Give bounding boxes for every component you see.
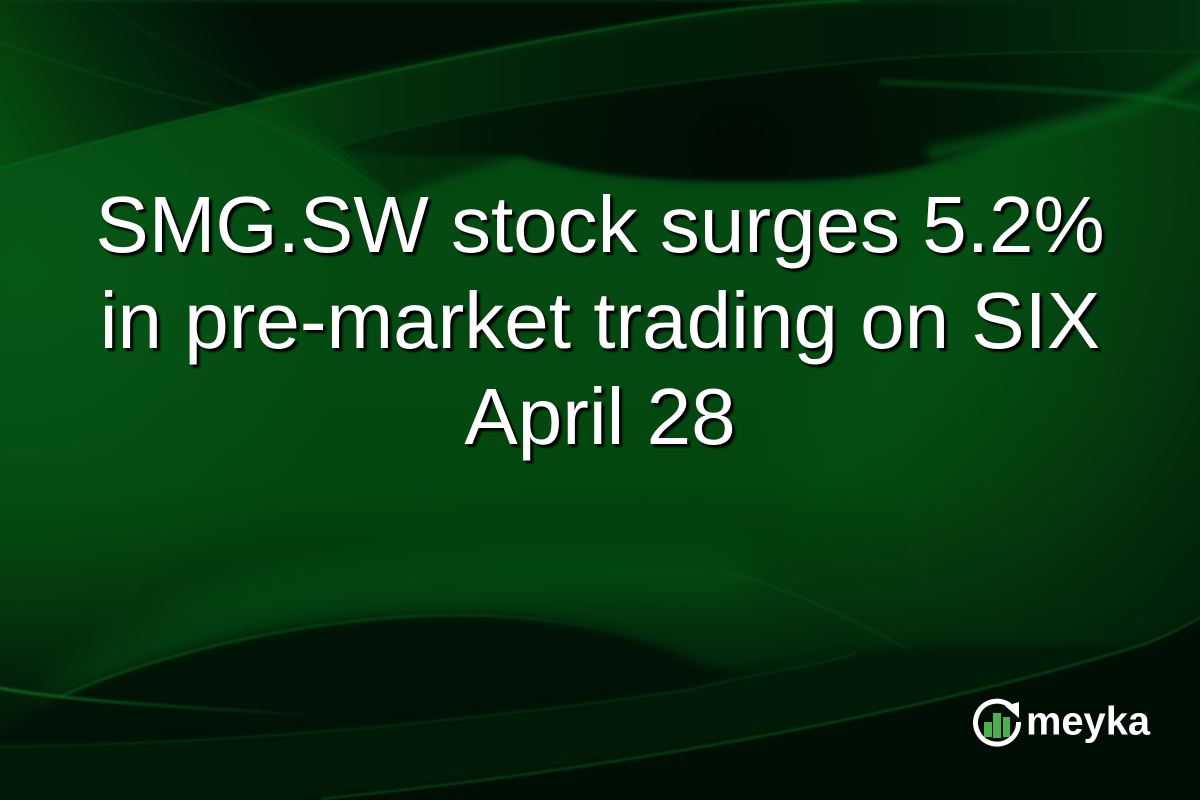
- title: SMG.SW stock surges 5.2%: [95, 180, 1105, 269]
- upper dark area: [0, 0, 860, 174]
- title: in pre-market trading on SIX: [100, 276, 1100, 365]
- dark mound: [0, 615, 857, 747]
- wordmark: meyka: [1026, 700, 1151, 744]
- icon: circular arrow with bars: [976, 701, 1019, 744]
- title: [95, 180, 1106, 465]
- lower waves: [190, 514, 860, 600]
- logo: meyka: [973, 698, 1151, 747]
- upper streaks: [933, 55, 1200, 153]
- title: April 28: [464, 372, 736, 461]
